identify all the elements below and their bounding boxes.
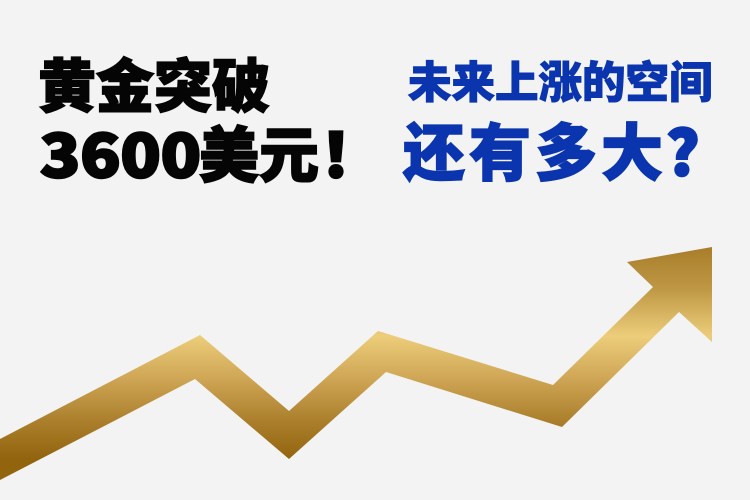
subtitle line 1: 未来上涨的空间 <box>408 48 712 111</box>
subtitle line 2: 还有多大？ <box>403 103 733 193</box>
title line 1: 黄金突破 <box>38 40 270 124</box>
title line 2: US dollars: 美元 <box>199 108 319 195</box>
title: gold breaks 3600 <box>38 40 381 195</box>
title line 2: number: 3600 <box>40 109 201 194</box>
title line 2: exclamation mark: ！ <box>321 108 381 195</box>
subtitle: how much room to rise <box>402 48 733 193</box>
